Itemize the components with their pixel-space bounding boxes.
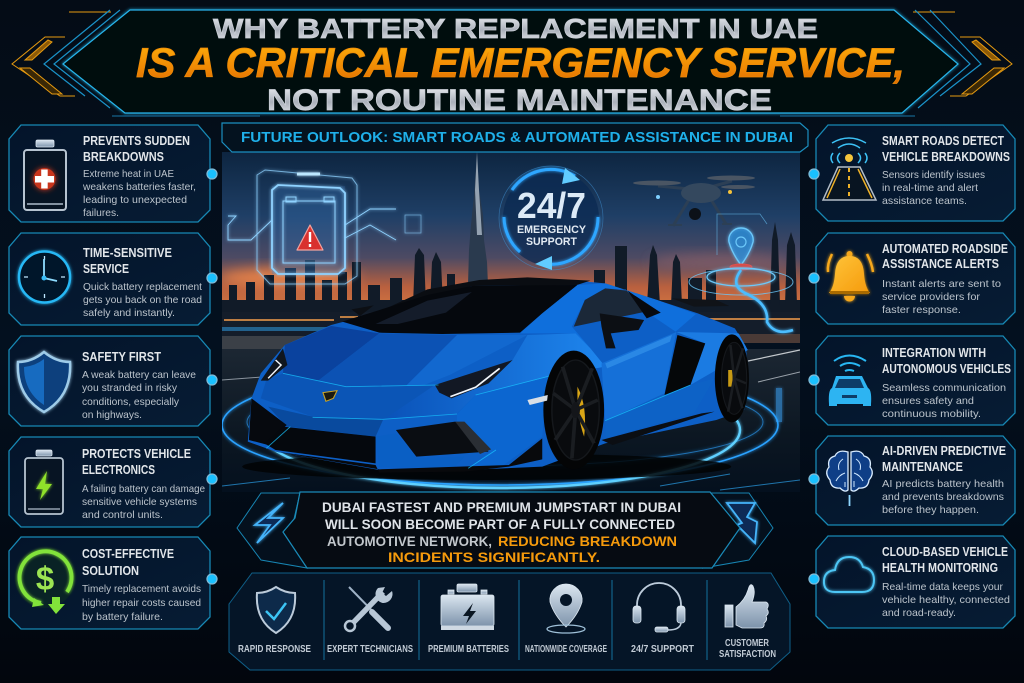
- text: time-sensitive service: TIME-SENSITIVE: [83, 246, 172, 260]
- text: protects vehicle electronics: A failing battery can damage: [82, 483, 205, 495]
- text: smart roads: [882, 134, 1010, 207]
- text: automated alerts: ASSISTANCE ALERTS: [882, 257, 999, 271]
- item: rapid response: [238, 587, 311, 655]
- text: autonomous vehicles: Seamless communication: [882, 382, 1006, 394]
- hood panels: [283, 326, 379, 385]
- outer blue chevrons: [44, 10, 981, 108]
- item: customer satisfaction: SATISFACTION: [719, 649, 776, 660]
- icon: battery with medical cross: [24, 140, 66, 210]
- text: cost-effective solution: COST-EFFECTIVE: [82, 547, 174, 561]
- icon: battery with bolt: [25, 450, 63, 514]
- connector dot: [809, 375, 819, 385]
- icon: cloud: [824, 557, 874, 592]
- item: premium batteries: PREMIUM BATTERIES: [428, 644, 509, 655]
- text: predictive maintenance: AI-DRIVEN PREDICTIVE: [882, 444, 1006, 458]
- item: 24/7 support: [631, 583, 694, 655]
- text: time-sensitive service: Quick battery replacement: [83, 281, 202, 293]
- text: prevents sudden breakdowns: BREAKDOWNS: [83, 150, 164, 164]
- text: predictive maintenance: before they happen.: [882, 504, 979, 516]
- hood badge: [323, 391, 337, 401]
- panel: automated alerts: [809, 233, 1015, 324]
- item: premium batteries: [428, 584, 509, 655]
- message plate: [283, 492, 740, 568]
- mirror: [600, 313, 644, 348]
- side skirt: [602, 412, 714, 445]
- panel: service benefits: [229, 573, 790, 670]
- connector dot: [207, 169, 217, 179]
- text: automated alerts: Instant alerts are sent to: [882, 278, 1001, 290]
- text: cost-effective solution: SOLUTION: [82, 564, 139, 578]
- panel: smart roads: [809, 125, 1015, 221]
- header banner: [12, 10, 1012, 117]
- side intake: [664, 335, 705, 395]
- side marker: [527, 395, 548, 405]
- connector dot: [809, 169, 819, 179]
- text: autonomous vehicles: [882, 346, 1011, 420]
- glowing rings on ground: [222, 394, 782, 492]
- text: prevents sudden breakdowns: weakens batteries faster,: [82, 181, 196, 193]
- item: rapid response: RAPID RESPONSE: [238, 644, 311, 655]
- spoiler: [672, 298, 729, 307]
- blue chin: [376, 436, 377, 438]
- text: autonomous vehicles: continuous mobility.: [882, 408, 981, 420]
- text: automated alerts: service providers for: [882, 291, 981, 303]
- item: expert technicians: [327, 587, 413, 655]
- 24/7 emergency badge: EMERGENCY: [517, 224, 587, 236]
- connector dot: [207, 574, 217, 584]
- road and barrier: [222, 322, 800, 336]
- text: protects vehicle electronics: and control units.: [82, 509, 163, 521]
- front intake left: [249, 398, 287, 445]
- title plate: [63, 10, 958, 113]
- roof: [390, 277, 590, 307]
- text: safety first: SAFETY FIRST: [82, 350, 161, 364]
- text: time-sensitive service: gets you back on the road: [83, 294, 202, 306]
- text: smart roads: Sensors identify issues: [882, 169, 985, 181]
- message text: [322, 500, 681, 565]
- text: cloud monitoring: [882, 545, 1010, 619]
- warning triangle: [297, 225, 323, 250]
- right headlight: [435, 360, 513, 398]
- road light streaks: [222, 474, 800, 490]
- side window: [574, 288, 646, 327]
- text: predictive maintenance: AI predicts battery health: [882, 478, 1004, 490]
- text: cost-effective solution: [82, 547, 201, 623]
- location hologram: [689, 214, 793, 332]
- icon: right lightning hexagon: [703, 493, 773, 568]
- battery hologram: [228, 170, 421, 284]
- panel: cost-effective solution: [9, 537, 217, 629]
- text: automated alerts: faster response.: [882, 304, 961, 316]
- Burj Khalifa tower: [468, 152, 488, 285]
- front fascia: [261, 373, 439, 420]
- 24/7 emergency badge: [499, 166, 603, 270]
- left amber chevrons: [12, 12, 111, 96]
- door: [602, 332, 676, 421]
- text: time-sensitive service: safely and instantly.: [83, 307, 175, 319]
- right intake: [396, 422, 489, 457]
- text: automated alerts: [882, 242, 1008, 316]
- item: customer satisfaction: CUSTOMER: [725, 638, 770, 649]
- right amber chevrons: [913, 12, 1012, 96]
- panel: protects vehicle electronics: [9, 437, 217, 527]
- drone: [633, 176, 755, 226]
- connector dot: [207, 474, 217, 484]
- text: cost-effective solution: Timely replacement avoids: [82, 583, 201, 595]
- text: cloud monitoring: Real-time data keeps your: [882, 581, 1003, 593]
- text: autonomous vehicles: ensures safety and: [882, 395, 974, 407]
- text: safety first: A weak battery can leave: [82, 369, 196, 381]
- icon: clock: [19, 252, 70, 302]
- text: cost-effective solution: higher repair costs caused: [82, 597, 201, 609]
- text: protects vehicle electronics: ELECTRONICS: [82, 463, 155, 477]
- item: customer satisfaction: [719, 585, 776, 660]
- panel: time-sensitive service: [9, 233, 217, 325]
- icon: dollar refresh: $: [36, 560, 54, 597]
- callout: jumpstart message: [237, 492, 773, 568]
- text: time-sensitive service: [83, 246, 202, 319]
- rear wheel: [715, 334, 749, 422]
- title text: NOT ROUTINE MAINTENANCE: [267, 84, 772, 117]
- item: 24/7 support: 24/7 SUPPORT: [631, 644, 694, 655]
- text: prevents sudden breakdowns: leading to unexpected: [83, 194, 187, 206]
- text: predictive maintenance: MAINTENANCE: [882, 460, 963, 474]
- hero scene: [220, 152, 800, 492]
- text: time-sensitive service: SERVICE: [83, 262, 129, 276]
- panel: predictive maintenance: [809, 436, 1015, 525]
- front splitter: [276, 438, 542, 473]
- car: [242, 277, 749, 480]
- text: prevents sudden breakdowns: [82, 134, 196, 219]
- connector dot: [207, 375, 217, 385]
- connector dot: [809, 273, 819, 283]
- section banner: future outlook: [222, 123, 808, 152]
- icon: connected car: [829, 356, 871, 406]
- message text: INCIDENTS SIGNIFICANTLY.: [388, 550, 600, 565]
- text: cloud monitoring: and road-ready.: [882, 607, 956, 619]
- text: protects vehicle electronics: [82, 447, 205, 521]
- left headlight: [261, 348, 287, 381]
- panel: autonomous vehicles: [809, 336, 1015, 425]
- panel: safety first: [9, 336, 217, 426]
- item: nationwide coverage: NATIONWIDE COVERAGE: [525, 644, 607, 655]
- right fender: [383, 333, 605, 420]
- message text: AUTOMOTIVE NETWORK,: [327, 534, 492, 549]
- text: prevents sudden breakdowns: Extreme heat in UAE: [83, 168, 174, 180]
- 24/7 emergency badge: SUPPORT: [526, 236, 577, 248]
- text: autonomous vehicles: INTEGRATION WITH: [882, 346, 986, 360]
- item: nationwide coverage: [525, 584, 607, 655]
- panel: prevents sudden breakdowns: [9, 125, 217, 222]
- city skyline: [222, 222, 800, 312]
- panel: cloud monitoring: [809, 536, 1015, 628]
- text: safety first: you stranded in risky: [82, 382, 178, 394]
- center lower intake: [264, 427, 376, 463]
- title text: IS A CRITICAL EMERGENCY SERVICE,: [136, 39, 905, 86]
- message text: WILL SOON BECOME PART OF A FULLY CONNECTED: [325, 517, 675, 532]
- connector dot: [809, 474, 819, 484]
- section banner: future outlook: FUTURE OUTLOOK: SMART ROADS & AUTOMATED ASSISTANCE IN DUBAI: [241, 129, 793, 146]
- 24/7 emergency badge: 24/7: [517, 185, 586, 226]
- message text: DUBAI FASTEST AND PREMIUM JUMPSTART IN DUBAI: [322, 500, 681, 515]
- blue a-pillar and roof sweep: [520, 283, 696, 348]
- text: protects vehicle electronics: PROTECTS VEHICLE: [82, 447, 191, 461]
- icon: left lightning hexagon: [237, 493, 307, 568]
- text: predictive maintenance: [882, 444, 1006, 516]
- text: cloud monitoring: vehicle healthy, connected: [882, 594, 1010, 606]
- text: predictive maintenance: and prevents breakdowns: [882, 491, 1004, 503]
- title text: WHY BATTERY REPLACEMENT IN UAE: [213, 13, 818, 44]
- windshield: [342, 285, 577, 334]
- text: smart roads: in real-time and alert: [882, 182, 978, 194]
- text: cost-effective solution: by battery failure.: [82, 611, 163, 623]
- cyan accents: [266, 373, 690, 468]
- text: safety first: [82, 350, 196, 421]
- text: protects vehicle electronics: sensitive vehicle systems: [82, 496, 197, 508]
- text: safety first: conditions, especially: [82, 396, 180, 408]
- text: smart roads: assistance teams.: [882, 195, 967, 207]
- connector dot: [809, 574, 819, 584]
- item: expert technicians: EXPERT TECHNICIANS: [327, 644, 413, 655]
- title text: [136, 13, 905, 117]
- icon: shield: [18, 352, 70, 412]
- text: prevents sudden breakdowns: PREVENTS SUDDEN: [83, 134, 190, 148]
- front wheel: [543, 351, 604, 469]
- text: cloud monitoring: HEALTH MONITORING: [882, 561, 998, 575]
- message text: REDUCING BREAKDOWN: [498, 534, 677, 549]
- icon: road sensor: [823, 138, 876, 200]
- text: prevents sudden breakdowns: failures.: [83, 207, 119, 219]
- icon: bell: [828, 251, 873, 302]
- connector dot: [207, 273, 217, 283]
- text: safety first: on highways.: [82, 409, 142, 421]
- icon: brain: [827, 451, 872, 506]
- icon: dollar refresh: [15, 548, 75, 614]
